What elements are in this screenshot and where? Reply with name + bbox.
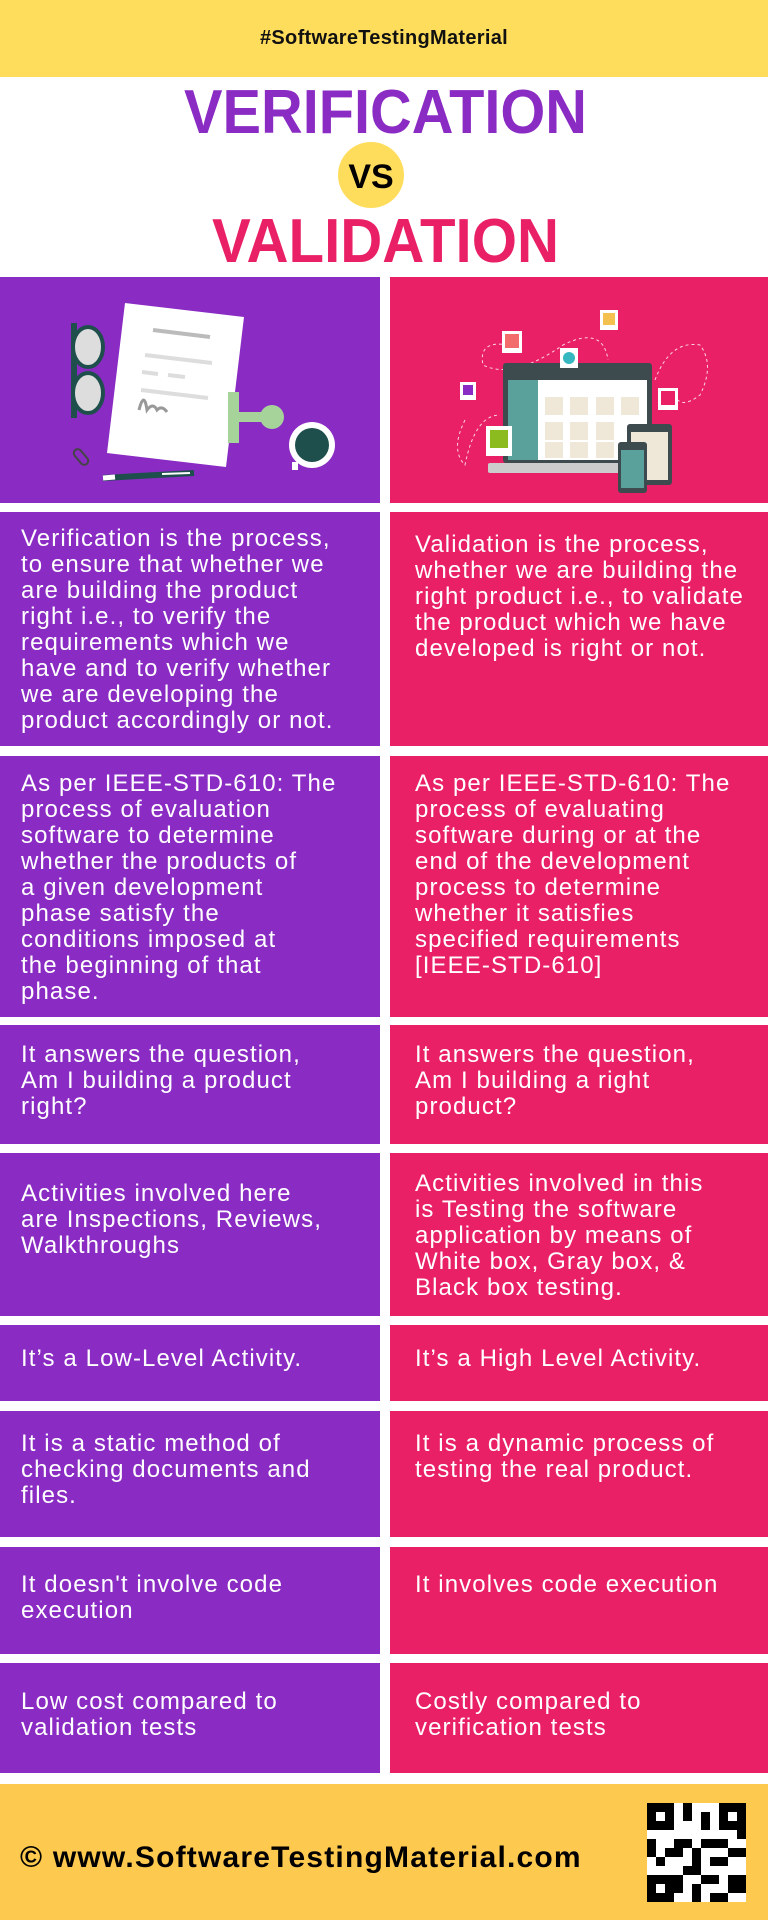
row 9 left (0, 1663, 380, 1773)
row 4 left (0, 1025, 380, 1144)
row 3 left: As per IEEE-STD-610: The (21, 770, 336, 797)
row 8 right (390, 1547, 768, 1654)
icon: paperclip (72, 448, 90, 466)
row 3 left: phase satisfy the (21, 900, 220, 927)
row 2 left: we are developing the (21, 681, 279, 708)
hashtag: #SoftwareTestingMaterial (260, 27, 508, 49)
icon: pen (103, 473, 194, 478)
row 9 left: validation tests (21, 1714, 197, 1741)
row 3 right (390, 756, 768, 1017)
row 2 right: whether we are building the (415, 557, 738, 584)
row 5 right: application by means of (415, 1222, 692, 1249)
row 3 left: whether the products of (21, 848, 297, 875)
row 3 right: specified requirements (415, 926, 681, 953)
floating icons (460, 310, 678, 456)
row 6 right: It’s a High Level Activity. (415, 1345, 701, 1372)
row 9 right: Costly compared to (415, 1688, 642, 1715)
row 6 left (0, 1325, 380, 1401)
title: verification: VERIFICATION (184, 78, 587, 147)
row 2 left: to ensure that whether we (21, 551, 325, 578)
row 8 left: execution (21, 1597, 134, 1624)
row 3 right: [IEEE-STD-610] (415, 952, 602, 979)
top banner (0, 0, 768, 77)
row 3 left: the beginning of that (21, 952, 262, 979)
title (184, 78, 587, 276)
row 2 left (0, 512, 380, 746)
row 5 right: Activities involved in this (415, 1170, 703, 1197)
row 2 left: are building the product (21, 577, 298, 604)
row 8 left: It doesn't involve code (21, 1571, 283, 1598)
row 3 left: process of evaluation (21, 796, 271, 823)
row 3 left: phase. (21, 978, 100, 1005)
qr code (647, 1803, 746, 1902)
row 5 left: Walkthroughs (21, 1232, 180, 1259)
row 5 right: Black box testing. (415, 1274, 623, 1301)
row 7 left (0, 1411, 380, 1537)
row 2 right: the product which we have (415, 609, 727, 636)
row 7 right: testing the real product. (415, 1456, 693, 1483)
row 3 right: software during or at the (415, 822, 701, 849)
row 4 right (390, 1025, 768, 1144)
row 2 left: right i.e., to verify the (21, 603, 271, 630)
row 2 right (390, 512, 768, 746)
row 4 left: Am I building a product (21, 1067, 292, 1094)
row 5 right (390, 1153, 768, 1316)
row 5 left: Activities involved here (21, 1180, 292, 1207)
footer url: © www.SoftwareTestingMaterial.com (20, 1841, 582, 1874)
row 4 right: product? (415, 1093, 517, 1120)
dashed paths (458, 338, 708, 465)
row 3 right: end of the development (415, 848, 690, 875)
row 3 right: process of evaluating (415, 796, 665, 823)
row 2 right: developed is right or not. (415, 635, 706, 662)
icon: stamp (228, 392, 284, 443)
row 3 left (0, 756, 380, 1017)
row 5 left (0, 1153, 380, 1316)
row 9 left: Low cost compared to (21, 1688, 278, 1715)
icon: tablet and phone (618, 424, 672, 493)
row 3 left: a given development (21, 874, 263, 901)
row 5 right: White box, Gray box, & (415, 1248, 686, 1275)
row 9 right: verification tests (415, 1714, 607, 1741)
icon: coffee cup (289, 422, 335, 470)
row 5 left: are Inspections, Reviews, (21, 1206, 322, 1233)
row 2 right: Validation is the process, (415, 531, 709, 558)
vs badge: VS (348, 158, 394, 196)
row 2 right: right product i.e., to validate (415, 583, 744, 610)
footer (0, 1784, 768, 1920)
row 3 right: process to determine (415, 874, 661, 901)
row 7 left: checking documents and (21, 1456, 311, 1483)
icon: laptop (488, 363, 652, 473)
icon: glasses (71, 323, 103, 418)
panel: validation illustration (390, 277, 768, 503)
row 7 right (390, 1411, 768, 1537)
row 7 left: files. (21, 1482, 77, 1509)
row 5 right: is Testing the software (415, 1196, 677, 1223)
row 8 right: It involves code execution (415, 1571, 718, 1598)
panel: verification illustration (0, 277, 380, 503)
row 7 left: It is a static method of (21, 1430, 281, 1457)
row 3 left: conditions imposed at (21, 926, 276, 953)
row 2 left: product accordingly or not. (21, 707, 334, 734)
row 7 right: It is a dynamic process of (415, 1430, 714, 1457)
row 4 right: Am I building a right (415, 1067, 650, 1094)
row 8 left (0, 1547, 380, 1654)
row 6 right (390, 1325, 768, 1401)
icon: document (107, 303, 244, 467)
row 3 right: whether it satisfies (415, 900, 634, 927)
row 2 left: have and to verify whether (21, 655, 331, 682)
row 2 left: Verification is the process, (21, 525, 331, 552)
row 6 left: It’s a Low-Level Activity. (21, 1345, 302, 1372)
row 4 left: It answers the question, (21, 1041, 301, 1068)
row 2 left: requirements which we (21, 629, 290, 656)
row 3 right: As per IEEE-STD-610: The (415, 770, 730, 797)
row 4 right: It answers the question, (415, 1041, 695, 1068)
row 3 left: software to determine (21, 822, 275, 849)
row 4 left: right? (21, 1093, 88, 1120)
title: validation: VALIDATION (212, 207, 559, 276)
vs badge (338, 142, 404, 208)
row 9 right (390, 1663, 768, 1773)
